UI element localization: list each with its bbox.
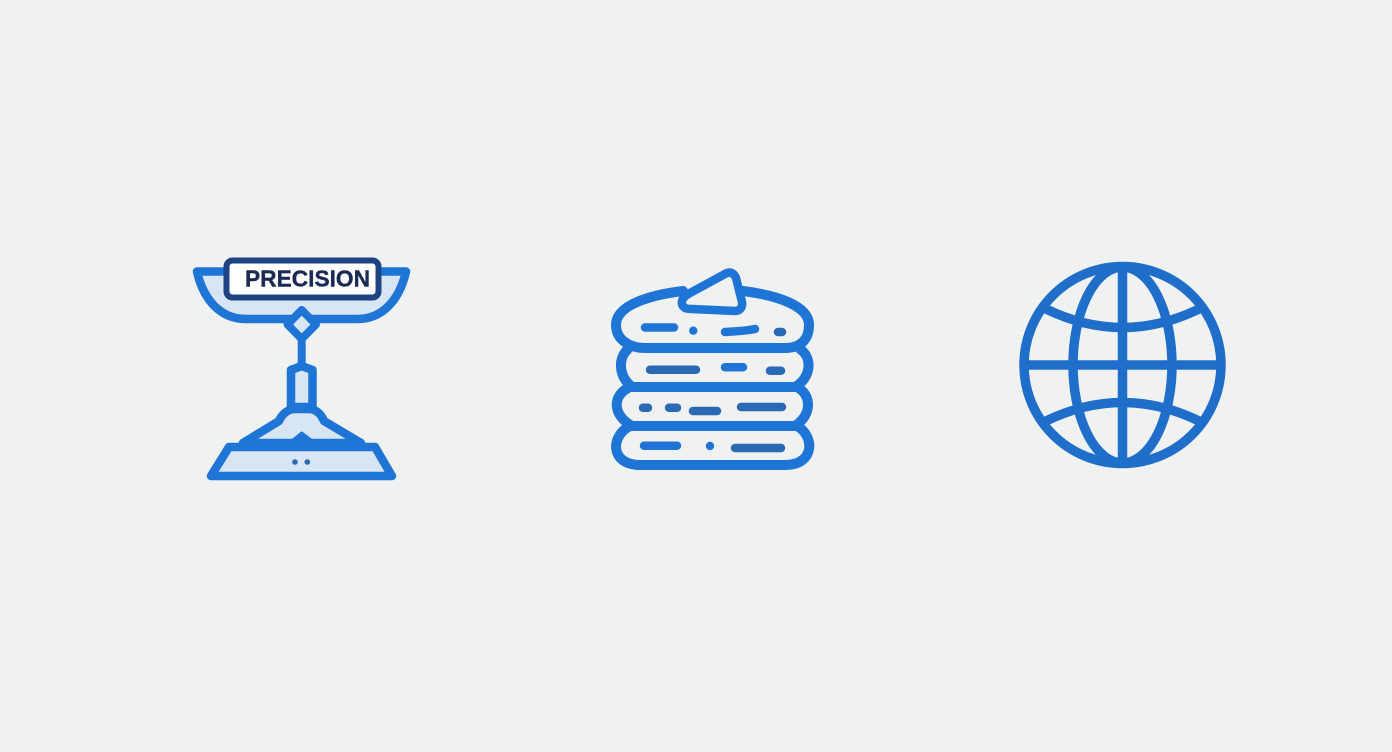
central meridian (1118, 267, 1127, 463)
icon: globe (1024, 266, 1221, 464)
layer 2 outline (621, 349, 809, 387)
scale column (291, 366, 312, 407)
label plate (226, 260, 378, 298)
meridian ellipse (1073, 267, 1172, 463)
layer 2 marks (650, 367, 781, 371)
scale peak (288, 433, 316, 444)
equator (1024, 360, 1221, 370)
layer 4 outline (616, 426, 809, 465)
scale diamond joint (288, 310, 316, 339)
base dots (292, 459, 310, 465)
layer 3 outline (617, 387, 808, 426)
wedge on top (682, 273, 742, 311)
lower parallel (1046, 402, 1199, 421)
globe outline (1024, 266, 1221, 464)
layer 1 marks (645, 326, 782, 335)
icon: precision scale (197, 260, 406, 476)
scale stem (298, 339, 306, 366)
upper parallel (1046, 309, 1199, 328)
layer 4 marks (644, 442, 781, 450)
scale dome (243, 409, 361, 443)
layer 3 marks (643, 407, 782, 411)
icon: layered stack (616, 273, 809, 465)
scale bowl (197, 272, 406, 319)
layer 1 outline (616, 291, 809, 348)
label text: PRECISION (245, 266, 370, 292)
scale base (211, 447, 392, 476)
